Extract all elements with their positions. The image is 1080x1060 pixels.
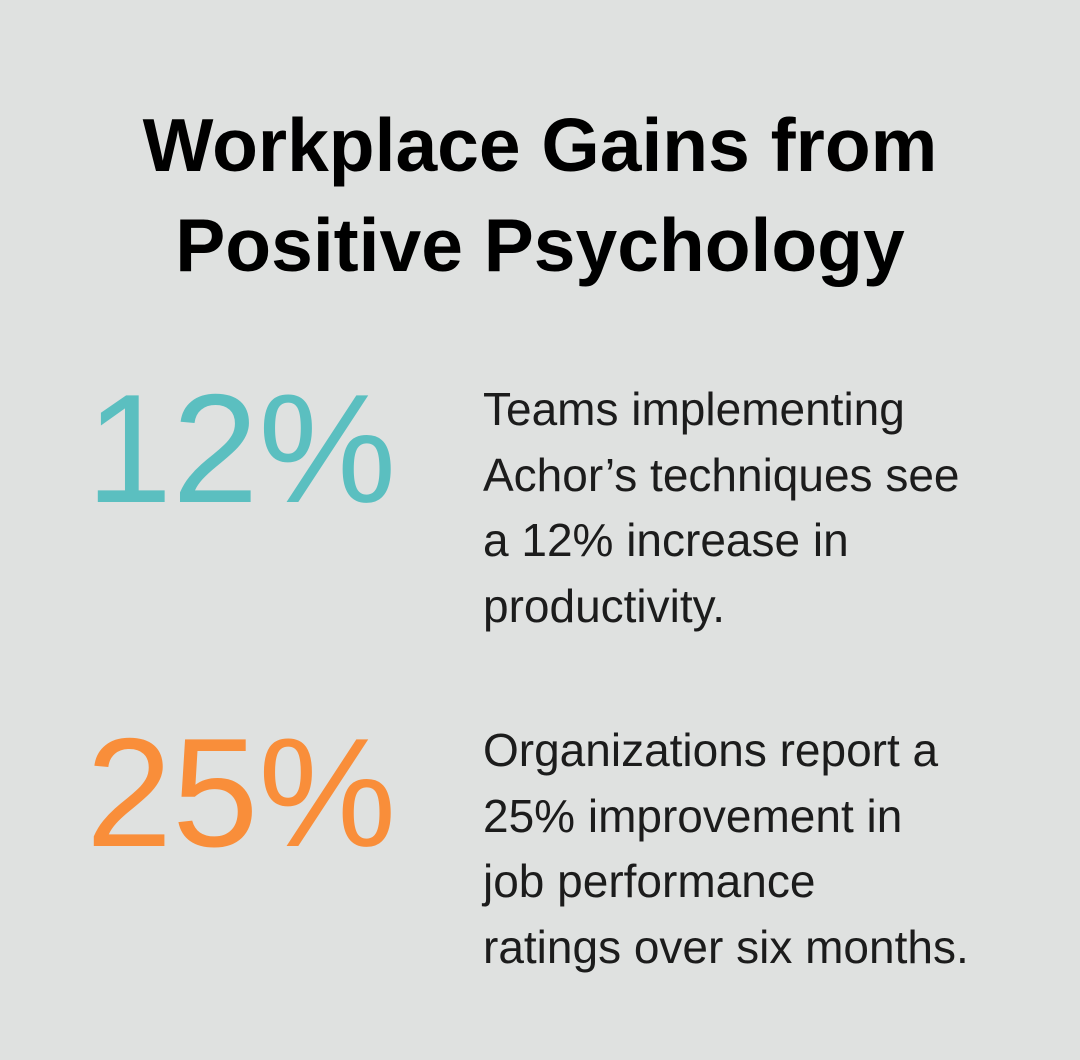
text: 12% description	[483, 383, 960, 632]
text: 12% description: Teams implementing	[483, 383, 905, 435]
text: 12% description: a 12% increase in	[483, 514, 849, 566]
text: 12% description: Achor’s techniques see	[483, 448, 960, 500]
text: 25% description: 25% improvement in	[483, 790, 902, 842]
title: Positive Psychology	[175, 203, 905, 287]
text: 25% description: job performance	[483, 855, 815, 907]
title: Workplace Gains from	[143, 103, 937, 187]
text: 12% description: productivity.	[483, 580, 725, 632]
text: 25% description: ratings over six months.	[483, 920, 969, 972]
title	[142, 103, 937, 287]
text: 25% description: Organizations report a	[483, 724, 938, 776]
stat: 25%: 25%	[86, 706, 396, 879]
stat: 12%: 12%	[86, 362, 396, 535]
text: 25% description	[482, 724, 969, 972]
